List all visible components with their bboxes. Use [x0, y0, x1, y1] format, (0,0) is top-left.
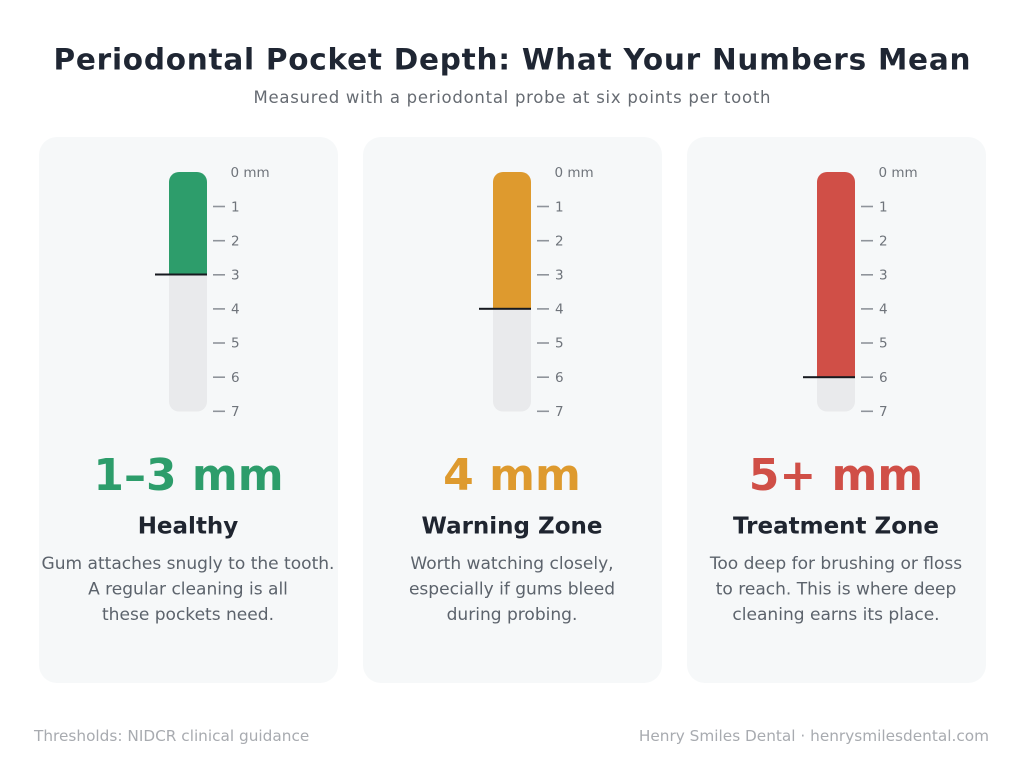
range value: 5+ mm — [749, 450, 923, 501]
depth scale: 2 — [555, 234, 564, 250]
range value: 4 mm — [443, 450, 581, 501]
description: cleaning earns its place. — [732, 605, 940, 625]
description: these pockets need. — [102, 605, 274, 625]
footer: source: Thresholds: NIDCR clinical guidance — [33, 727, 309, 745]
description: during probing. — [447, 605, 577, 625]
depth scale: 3 — [231, 268, 240, 284]
depth scale: 1 — [231, 200, 240, 216]
description — [709, 554, 962, 625]
description: to reach. This is where deep — [716, 580, 956, 600]
panel background — [363, 137, 662, 683]
depth scale: 2 — [879, 234, 888, 250]
zone heading: Healthy — [138, 514, 238, 540]
zone heading: Warning Zone — [422, 514, 602, 540]
description: Too deep for brushing or floss — [709, 554, 962, 574]
depth scale: 2 — [231, 234, 240, 250]
subtitle: Measured with a periodontal probe at six points per tooth — [254, 88, 770, 107]
depth scale: 3 — [555, 268, 564, 284]
panel background — [687, 137, 986, 683]
panel: healthy — [39, 137, 338, 683]
panel: warning — [363, 137, 662, 683]
description: Worth watching closely, — [410, 554, 614, 574]
panel background — [39, 137, 338, 683]
depth scale: 5 — [879, 336, 888, 352]
description: especially if gums bleed — [409, 580, 615, 600]
depth scale: 5 — [231, 336, 240, 352]
footer: credit: Henry Smiles Dental · henrysmilesdental.com — [639, 727, 989, 745]
zone heading: Treatment Zone — [733, 514, 939, 540]
depth scale: 3 — [879, 268, 888, 284]
description: A regular cleaning is all — [88, 580, 288, 600]
description — [409, 554, 615, 625]
depth scale: 7 — [555, 404, 564, 420]
depth scale: 6 — [879, 370, 888, 386]
depth scale — [537, 165, 594, 420]
probe gauge: 3 mm — [155, 172, 207, 412]
depth scale: 0 mm — [554, 165, 594, 181]
depth scale — [861, 165, 918, 420]
depth scale: 6 — [555, 370, 564, 386]
depth scale: 4 — [231, 302, 240, 318]
description — [42, 554, 334, 625]
depth scale: 4 — [879, 302, 888, 318]
probe gauge: 6 mm — [803, 172, 855, 412]
depth scale: 1 — [555, 200, 564, 216]
depth scale: 0 mm — [230, 165, 270, 181]
probe gauge: 4 mm — [479, 172, 531, 412]
depth scale: 1 — [879, 200, 888, 216]
depth scale — [213, 165, 270, 420]
range value: 1–3 mm — [93, 450, 284, 501]
depth scale: 7 — [231, 404, 240, 420]
depth scale: 4 — [555, 302, 564, 318]
depth scale: 6 — [231, 370, 240, 386]
description: Gum attaches snugly to the tooth. — [42, 554, 334, 574]
panel: treatment — [687, 137, 986, 683]
depth scale: 5 — [555, 336, 564, 352]
depth scale: 7 — [879, 404, 888, 420]
title: Periodontal Pocket Depth: What Your Numbers Mean — [54, 42, 970, 76]
depth scale: 0 mm — [878, 165, 918, 181]
